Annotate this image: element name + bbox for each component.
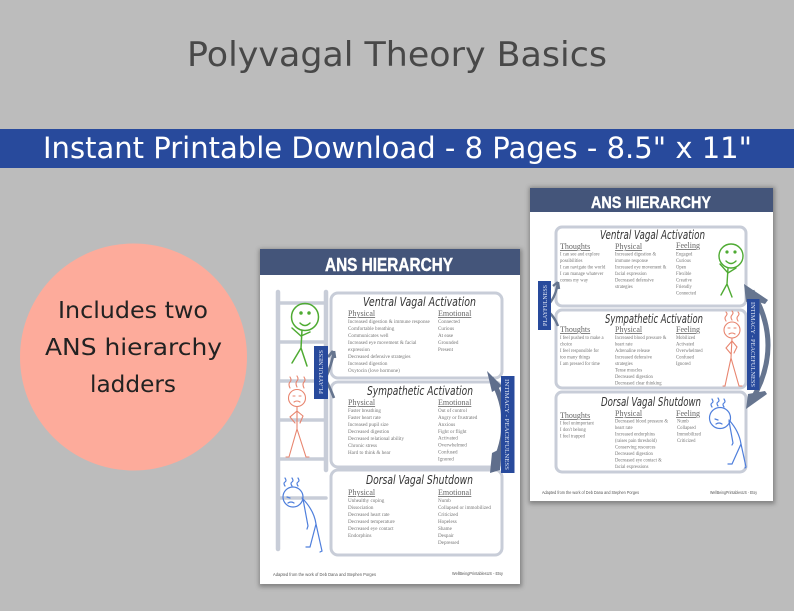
panel: sympathetic: Confused <box>676 356 695 360</box>
panel: sympathetic: Mobilized <box>676 336 696 341</box>
label: intimacy peacefulness: INTIMACY - PEACEFULNESS <box>503 379 510 470</box>
panel: right worksheet page <box>529 187 775 504</box>
panel: left worksheet page <box>259 249 522 587</box>
panel: sympathetic: Sympathetic Activation <box>367 383 473 398</box>
panel: sympathetic: I am pressed for time <box>560 362 600 367</box>
panel: dorsal vagal <box>331 470 502 555</box>
panel: dorsal vagal: Endorphins <box>348 533 372 539</box>
panel: sympathetic: Decreased digestion <box>615 375 654 380</box>
panel: dorsal vagal: Hopeless <box>438 519 457 525</box>
panel: ventral vagal: facial expression <box>615 272 647 277</box>
footer: WellBeingPrintablesUS - Etsy <box>710 490 758 495</box>
panel: ventral vagal: Increased eye movement & <box>615 266 667 270</box>
panel: sympathetic: Angry or frustrated <box>438 414 478 421</box>
panel: ventral vagal: Ventral Vagal Activation <box>600 227 705 242</box>
ladder <box>278 292 326 549</box>
panel: ventral vagal: expression <box>348 347 370 353</box>
panel: ventral vagal: Connected <box>438 319 460 325</box>
panel: dorsal vagal: Immobilized <box>677 432 702 438</box>
panel: sympathetic: strategies <box>615 362 633 367</box>
label: intimacy peacefulness <box>501 376 514 473</box>
panel: sympathetic: Faster breathing <box>348 408 381 414</box>
panel: sympathetic <box>331 382 502 467</box>
panel: dorsal vagal: Collapsed or immobilized <box>438 505 491 511</box>
panel: sympathetic: Overwhelmed <box>438 442 467 448</box>
label: intimacy peacefulness <box>747 299 760 390</box>
panel: ventral vagal: immune response <box>615 259 648 264</box>
panel: ventral vagal: Thoughts <box>560 242 590 251</box>
icon: green smiling figure <box>292 304 318 366</box>
panel: dorsal vagal: facial expressions <box>615 465 649 470</box>
panel: ventral vagal: Decreased defensive strategies <box>348 353 411 360</box>
panel: sympathetic: Decreased relational ability <box>348 436 404 442</box>
panel: ventral vagal: Emotional <box>438 309 472 318</box>
panel: dorsal vagal: Shame <box>438 526 453 532</box>
panel: dorsal vagal: Physical <box>348 488 376 497</box>
panel: ventral vagal: Ventral Vagal Activation <box>363 294 476 309</box>
panel: ventral vagal: Curious <box>676 259 691 264</box>
callout: includes two ladders: Includes two <box>58 298 208 324</box>
panel: ventral vagal: Friendly <box>676 285 693 290</box>
panel: dorsal vagal: Decreased blood pressure & <box>615 420 668 424</box>
panel: dorsal vagal: I feel unimportant <box>560 422 595 426</box>
panel: sympathetic: Decreased digestion <box>348 429 390 435</box>
panel: dorsal vagal: (raises pain threshold) <box>615 439 657 444</box>
panel: dorsal vagal: Decreased eye contact & <box>615 458 662 464</box>
panel: dorsal vagal: Feeling <box>676 409 700 418</box>
panel: ventral vagal: Present <box>438 347 454 353</box>
panel: dorsal vagal: Decreased digestion <box>615 452 654 457</box>
icon: red stressed figure <box>723 311 742 386</box>
panel: ventral vagal: Physical <box>615 242 643 251</box>
callout: includes two ladders <box>20 244 247 470</box>
panel: ventral vagal: Communicates well <box>348 333 389 339</box>
panel: dorsal vagal: Decreased temperature <box>348 519 396 525</box>
panel: ventral vagal: Creative <box>676 278 692 284</box>
callout: includes two ladders: ANS hierarchy <box>45 335 222 361</box>
arrow: intimacy peacefulness <box>744 284 768 409</box>
panel: dorsal vagal: Physical <box>615 409 643 418</box>
panel: ventral vagal: Oxytocin (love hormone) <box>348 367 400 374</box>
panel: dorsal vagal: Numb <box>677 420 689 424</box>
panel: dorsal vagal: Decreased heart rate <box>348 512 390 518</box>
footer: WellBeingPrintablesUS - Etsy <box>452 571 504 576</box>
panel: ventral vagal: Curious <box>438 326 454 332</box>
panel: sympathetic: Ignored <box>676 362 691 367</box>
callout: includes two ladders: ladders <box>90 372 176 398</box>
title: Polyvagal Theory Basics <box>187 35 607 75</box>
panel: dorsal vagal: I feel trapped <box>560 434 586 440</box>
panel: dorsal vagal: Depressed <box>438 540 460 546</box>
panel: ventral vagal: Increased eye movement & facial <box>348 339 417 346</box>
panel: sympathetic: Out of control <box>438 407 467 414</box>
page header: ANS HIERARCHY <box>325 255 453 275</box>
panel: ventral vagal: Increased digestion <box>348 361 388 367</box>
panel: sympathetic: Anxious <box>438 422 455 428</box>
panel: sympathetic: Ignored <box>438 456 454 462</box>
label: playfulness <box>538 281 551 330</box>
panel: dorsal vagal: Decreased eye contact <box>348 526 394 532</box>
panel: dorsal vagal: Conserving resources <box>615 446 656 450</box>
panel: sympathetic: Tense muscles <box>615 368 642 374</box>
panel: ventral vagal: I can navigate the world <box>560 266 606 270</box>
panel: dorsal vagal: Criticized <box>438 512 459 518</box>
panel: ventral vagal: I can see and explore <box>560 252 600 258</box>
panel: sympathetic: Feeling <box>676 325 700 334</box>
panel: dorsal vagal: Criticized <box>677 439 696 444</box>
panel: sympathetic: Overwhelmed <box>676 349 703 354</box>
panel: ventral vagal: Open <box>676 266 687 270</box>
label: playfulness: PLAYFULNESS <box>318 350 325 394</box>
panel: sympathetic: Faster heart rate <box>348 415 382 421</box>
banner: Instant Printable Download - 8 Pages - 8.5" x 11" <box>43 131 752 165</box>
panel: sympathetic: Chronic stress <box>348 443 377 449</box>
panel: sympathetic: Hard to think & hear <box>348 450 391 456</box>
arrow: intimacy peacefulness <box>487 371 504 473</box>
icon: blue slumped figure <box>710 398 746 468</box>
panel: ventral vagal: Connected <box>676 292 697 296</box>
panel: dorsal vagal: heart rate <box>615 426 633 431</box>
panel: sympathetic: I feel responsible for <box>560 349 599 354</box>
panel: ventral vagal: comes my way <box>560 278 589 284</box>
icon: blue slumped figure <box>283 478 322 552</box>
panel: dorsal vagal: Emotional <box>438 488 472 497</box>
label: intimacy peacefulness: INTIMACY - PEACEFULNESS <box>749 302 756 387</box>
panel: sympathetic: Decreased clear thinking <box>615 382 662 386</box>
icon: green smiling figure <box>719 244 743 297</box>
footer: Adapted from the work of Deb Dana and Stephen Porges <box>273 572 376 577</box>
panel: dorsal vagal: Dorsal Vagal Shutdown <box>601 394 701 409</box>
panel: sympathetic: Physical <box>348 398 376 407</box>
footer <box>273 571 504 577</box>
label: playfulness: PLAYFULNESS <box>542 285 549 326</box>
panel: sympathetic: Emotional <box>438 398 472 407</box>
panel: dorsal vagal: Despair <box>438 533 454 539</box>
panel: ventral vagal: Grounded <box>438 340 459 346</box>
panel: sympathetic: Physical <box>615 325 643 334</box>
panel: ventral vagal: Feeling <box>676 241 700 250</box>
panel: sympathetic: heart rate <box>615 342 633 348</box>
panel: ventral vagal <box>331 293 502 378</box>
panel: ventral vagal: At ease <box>438 333 454 339</box>
panel: dorsal vagal <box>556 392 746 472</box>
panel: sympathetic: Sympathetic Activation <box>605 311 703 326</box>
panel: dorsal vagal: Unhealthy coping <box>348 498 385 504</box>
panel: ventral vagal: Decreased defensive <box>615 278 654 284</box>
panel: sympathetic <box>556 310 746 388</box>
panel: sympathetic: Increased blood pressure & <box>615 336 667 341</box>
panel: ventral vagal: Comfortable breathing <box>348 325 395 332</box>
panel: dorsal vagal: Increased endorphins <box>615 432 655 438</box>
footer: Adapted from the work of Deb Dana and Stephen Porges <box>542 490 639 495</box>
icon: red stressed figure <box>286 376 309 457</box>
panel: dorsal vagal: Thoughts <box>560 411 590 420</box>
panel: sympathetic: too many things <box>560 356 590 360</box>
arrow: playfulness <box>549 282 559 326</box>
panel: sympathetic: Increased pupil size <box>348 422 389 428</box>
panel: sympathetic: I feel pushed to make a <box>560 336 605 341</box>
panel: sympathetic: Confused <box>438 448 458 456</box>
panel: sympathetic: Thoughts <box>560 325 590 334</box>
page header: ANS HIERARCHY <box>591 193 712 212</box>
panel: ventral vagal: Physical <box>348 309 376 318</box>
panel: sympathetic: choice <box>560 342 572 348</box>
panel: sympathetic: Activated <box>438 436 458 442</box>
panel: ventral vagal: I can manage whatever <box>560 272 604 277</box>
panel: dorsal vagal: Dorsal Vagal Shutdown <box>366 472 473 487</box>
panel: ventral vagal <box>556 227 746 306</box>
label: playfulness <box>314 346 328 399</box>
panel: ventral vagal: Engaged <box>676 252 693 258</box>
footer <box>542 490 758 495</box>
panel: sympathetic: Activated <box>676 342 695 348</box>
panel: ventral vagal: Increased digestion & <box>615 252 656 258</box>
page header <box>260 249 520 275</box>
panel: dorsal vagal: Numb <box>438 498 451 504</box>
panel: dorsal vagal: Dissociation <box>348 505 374 511</box>
page header <box>530 188 773 212</box>
panel: ventral vagal: possibilities <box>560 259 583 264</box>
panel: dorsal vagal: Collapsed <box>677 426 696 431</box>
panel: sympathetic: Adrenaline release <box>615 349 650 354</box>
panel: ventral vagal: Flexible <box>676 272 691 277</box>
panel: dorsal vagal: I don't belong <box>560 428 586 433</box>
panel: sympathetic: Increased defensive <box>615 356 652 360</box>
arrow: playfulness <box>327 351 335 398</box>
panel: ventral vagal: Increased digestion & immune response <box>348 319 431 325</box>
panel: sympathetic: Fight or flight <box>438 428 467 435</box>
panel: ventral vagal: strategies <box>615 285 633 290</box>
